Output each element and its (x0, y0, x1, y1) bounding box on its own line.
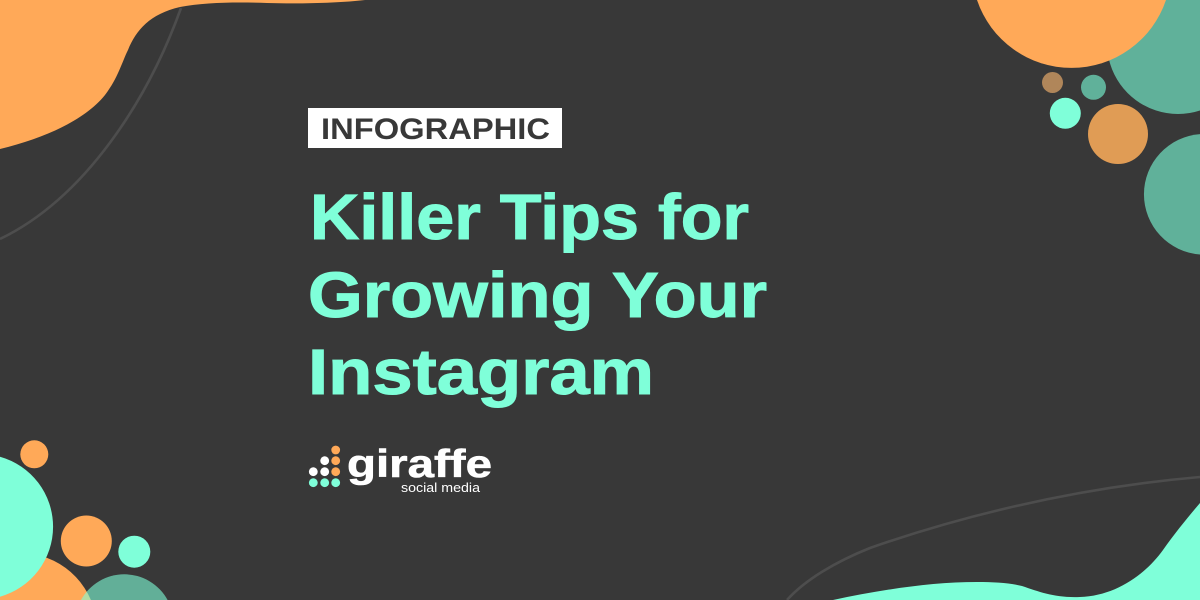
top-right circle cluster (977, 0, 1200, 254)
title: Killer Tips for (310, 181, 749, 253)
top-left orange blob (0, 0, 365, 149)
bottom-left circle cluster (0, 440, 168, 600)
logo icon: dots (309, 446, 340, 487)
bottom-right curved line (787, 477, 1200, 600)
title (308, 181, 767, 408)
title: Instagram (308, 336, 654, 408)
logo: giraffe social media (309, 443, 492, 495)
tag: INFOGRAPHIC (308, 108, 562, 148)
logo tagline: social media (401, 481, 480, 495)
bottom-right mint blob (833, 503, 1200, 600)
title: Growing Your (308, 259, 767, 331)
top-left curved line (0, 8, 181, 239)
logo wordmark: giraffe (347, 443, 492, 486)
tag: INFOGRAPHIC: INFOGRAPHIC (321, 113, 550, 146)
